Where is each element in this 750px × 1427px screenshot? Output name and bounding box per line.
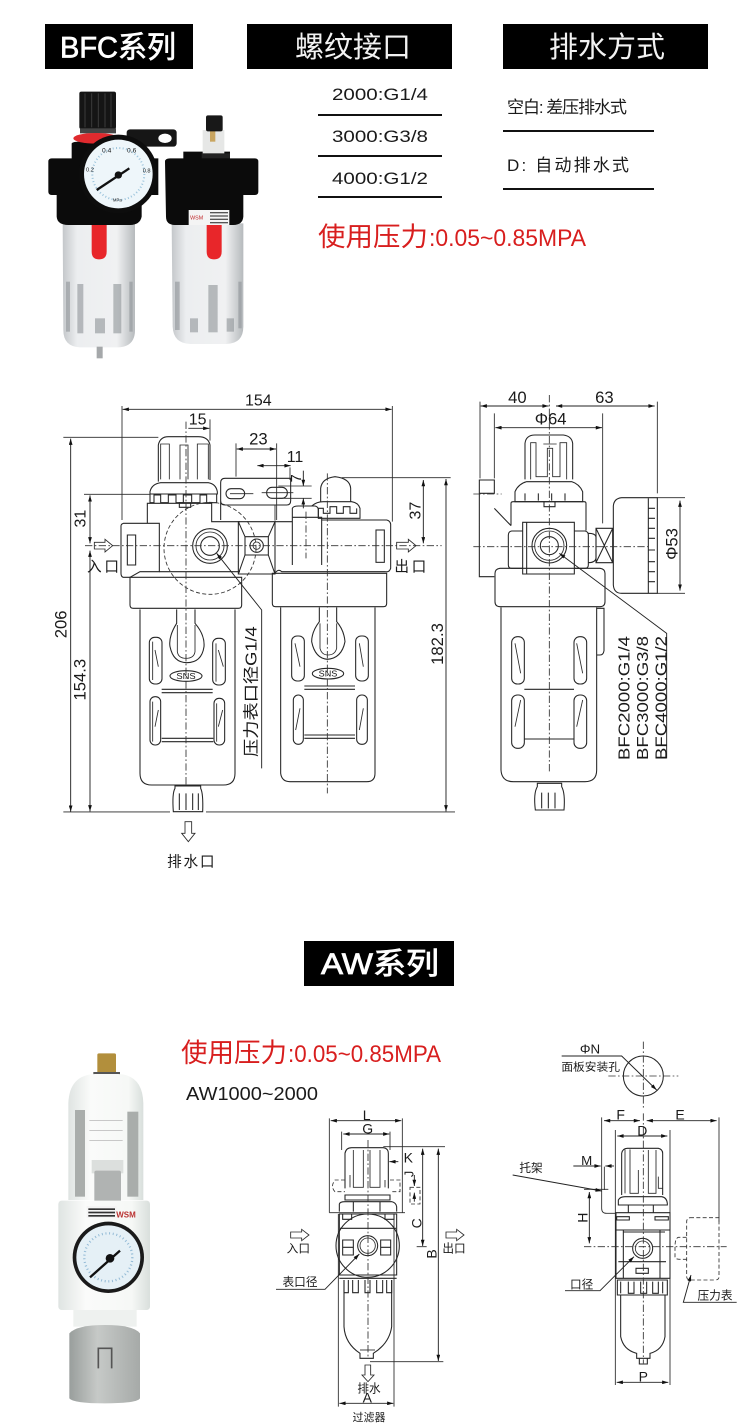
gauge port label and leader: [276, 1254, 359, 1289]
right lubricator unit: [272, 477, 391, 782]
dashed gauge outline: [675, 1218, 719, 1280]
inlet arrow and label: [287, 1229, 310, 1256]
drainage method table: 空白: 差压排水式: [507, 98, 627, 117]
outlet arrow and label: 出口: [442, 1242, 466, 1256]
product photo: AW filter regulator: [58, 1053, 150, 1403]
dimensions: Φ64: [535, 410, 567, 429]
product photo: BFC filter regulator: [48, 92, 258, 358]
panel mounting hole: 面板安装孔: [561, 1059, 620, 1073]
thread port table: [318, 85, 442, 197]
left regulator unit: SNS: [176, 671, 196, 681]
dimensions: 182.3: [428, 623, 447, 665]
dimensions: [573, 1106, 719, 1385]
pressure gauge label and leader: [683, 1275, 737, 1302]
technical drawing: BFC side view: [473, 388, 685, 810]
product photo: BFC filter regulator: 0.8: [143, 169, 151, 175]
dimensions: B: [423, 1249, 439, 1259]
heading: thread port: 螺纹接口: [295, 31, 411, 64]
heading: BFC series: [45, 24, 193, 69]
panel mounting hole: ΦN: [580, 1041, 600, 1056]
thread port table: 2000:G1/4: [332, 85, 428, 104]
dimensions: 37: [407, 502, 424, 520]
drain nipple: [97, 347, 103, 358]
dimensions: G: [362, 1120, 373, 1136]
dimensions: 23: [249, 430, 268, 449]
left regulator unit: [121, 437, 275, 812]
thread port table: 3000:G3/8: [332, 127, 428, 146]
thread port table: 4000:G1/2: [332, 169, 428, 188]
gauge side profile: [613, 498, 657, 593]
inlet arrow and label: 入口: [287, 1243, 310, 1256]
product photo: BFC filter regulator: MPa: [113, 198, 122, 203]
pressure gauge: [79, 135, 158, 213]
body: [616, 1148, 670, 1364]
product photo: BFC filter regulator: 0.6: [127, 148, 137, 155]
product photo: AW filter regulator: WSM: [116, 1210, 136, 1219]
body: [332, 1148, 420, 1358]
technical drawing: BFC front view: [52, 392, 455, 871]
dimensions: 31: [73, 510, 90, 528]
dimensions: 154.3: [71, 659, 90, 701]
centre lines: [85, 422, 442, 793]
dimensions: 154: [245, 392, 272, 409]
label: gauge port size: 压力表口径G1/4: [243, 626, 261, 757]
centre line: [367, 1140, 369, 1357]
drainage method table: [503, 98, 654, 189]
dimensions: 15: [189, 411, 207, 428]
dimensions: A: [363, 1390, 373, 1406]
model label: AW1000~2000: AW1000~2000: [186, 1084, 318, 1104]
technical drawing: AW filter: [276, 1107, 466, 1424]
red pressure note: BFC: 使用压力: [318, 222, 428, 252]
dimensions: L: [363, 1107, 371, 1123]
gauge port label and leader: 表口径: [283, 1275, 318, 1289]
inlet and outlet arrows: [94, 539, 416, 552]
lubricator sight glass: [203, 130, 224, 154]
technical drawing: AW side view: [513, 1041, 737, 1385]
label: inlet: 入口: [87, 559, 122, 575]
right bowl: [172, 223, 243, 344]
dimensions: 11: [287, 449, 303, 466]
grille slots: [66, 282, 242, 333]
label: drain port: 排水口: [167, 854, 216, 871]
red pressure note: BFC: :0.05~0.85MPA: [429, 225, 586, 252]
dimensions: H: [574, 1213, 590, 1223]
product photo: BFC filter regulator: 0.2: [86, 168, 94, 174]
dimensions: K: [404, 1149, 414, 1165]
right lubricator unit: SNS: [319, 669, 338, 679]
port label and leader: [565, 1257, 634, 1291]
gauge port leader: [217, 553, 262, 768]
dimensions: 63: [595, 388, 614, 407]
dimensions: [480, 388, 685, 593]
red tabs: [92, 225, 107, 259]
drain arrow and labels: 排水: [357, 1381, 381, 1395]
red pressure note: AW: :0.05~0.85MPA: [288, 1041, 441, 1068]
outlet arrow and label: [442, 1229, 466, 1256]
dimensions: J: [402, 1171, 416, 1177]
heading: AW series: [304, 941, 454, 986]
port size labels: BFC2000:G1/4: [617, 636, 634, 760]
drainage method table: D: 自动排水式: [507, 156, 629, 175]
drain arrow and labels: [357, 1365, 381, 1395]
label: filter: 过滤器: [353, 1411, 385, 1424]
dimensions: D: [637, 1122, 647, 1138]
heading: thread port: [247, 24, 452, 69]
label: [189, 210, 229, 225]
centre lines: [584, 1113, 727, 1363]
product photo: BFC filter regulator: 0.4: [102, 148, 112, 155]
port label and leader: 口径: [570, 1278, 594, 1291]
dimensions: Φ53: [662, 528, 681, 560]
dimensions: C: [409, 1218, 425, 1228]
red pressure note: AW: [181, 1038, 441, 1068]
port size labels: [617, 636, 670, 760]
centre lines: [473, 395, 648, 773]
drain arrow: [182, 822, 195, 842]
dimensions: 40: [508, 388, 527, 407]
bracket label and leader: [513, 1161, 602, 1191]
panel mounting hole: [561, 1041, 678, 1110]
heading: AW series: AW系列: [321, 948, 439, 981]
port size labels: BFC3000:G3/8: [635, 636, 652, 760]
red pressure note: BFC: [318, 222, 586, 252]
product photo: BFC filter regulator: WSM: [190, 215, 203, 221]
heading: drainage method: [503, 24, 708, 69]
bracket label and leader: 托架: [519, 1161, 543, 1175]
dimensions: P: [639, 1369, 648, 1385]
pressure gauge label and leader: 压力表: [698, 1288, 733, 1302]
black housings: [48, 142, 158, 225]
port size labels: BFC4000:G1/2: [653, 636, 670, 760]
left bowl: [63, 223, 135, 347]
dimensions: [52, 392, 455, 812]
mounting bracket: [221, 478, 293, 521]
dimensions: E: [675, 1106, 685, 1122]
dimensions: [329, 1107, 445, 1407]
heading: BFC series: BFC系列: [60, 32, 176, 64]
dimensions: M: [581, 1153, 592, 1168]
dimensions: F: [616, 1106, 625, 1122]
red pressure note: AW: 使用压力: [181, 1038, 287, 1068]
port size leader: [559, 553, 667, 758]
dimensions: 206: [52, 610, 71, 638]
heading: drainage method: 排水方式: [549, 31, 665, 64]
dimensions: 7: [289, 474, 305, 482]
label: outlet: 出口: [394, 558, 429, 575]
side view body: [479, 435, 613, 810]
